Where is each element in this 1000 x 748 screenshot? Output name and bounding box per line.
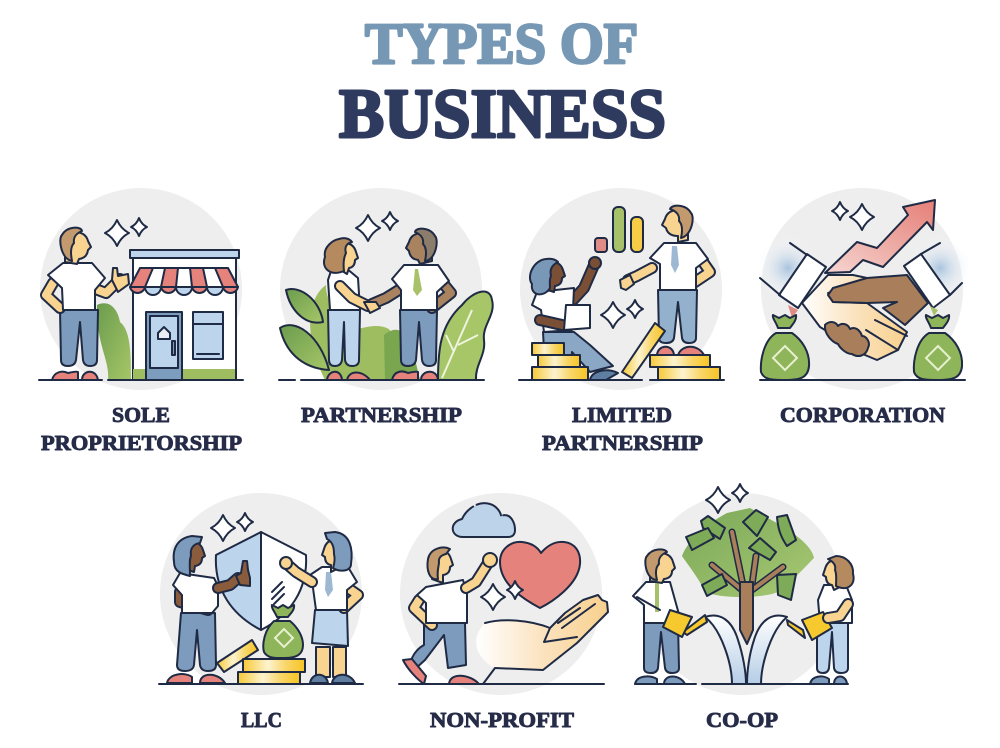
title <box>339 11 666 153</box>
background circle <box>40 188 242 390</box>
label: NON-PROFIT <box>430 708 574 732</box>
label: LLC <box>241 708 282 732</box>
background circle <box>641 493 843 695</box>
label: PROPRIETORSHIP <box>41 431 242 455</box>
ground line <box>279 379 484 381</box>
panel: co-op <box>633 484 854 732</box>
icon: bush <box>97 303 131 380</box>
icon: water streams <box>705 616 787 684</box>
figure: man on coins <box>620 206 710 355</box>
chart: bars <box>595 207 643 252</box>
panel: non-profit <box>399 493 608 732</box>
label: SOLE <box>112 403 170 427</box>
figure: man <box>364 229 451 380</box>
icon: money tree <box>682 508 814 644</box>
icon: rising arrow <box>825 200 935 273</box>
icon: coins and bag <box>217 605 305 684</box>
icon: shop <box>130 250 239 380</box>
label <box>41 403 242 455</box>
icon: plants <box>280 285 493 380</box>
icon: sparkles <box>601 300 643 328</box>
panel: partnership <box>279 188 493 427</box>
icon: heart <box>500 542 580 608</box>
background circle <box>280 188 482 390</box>
label: CO-OP <box>706 708 778 732</box>
icon: shield <box>216 532 306 630</box>
label: PARTNERSHIP <box>301 403 462 427</box>
icon: sparkles <box>211 513 253 541</box>
figure: woman <box>324 238 370 380</box>
decorative glow <box>756 236 972 300</box>
panel: llc <box>159 493 363 732</box>
panel: limited partnership <box>519 188 724 455</box>
icon: sparkles <box>706 484 748 513</box>
ground line <box>399 683 604 685</box>
panel: sole proprietorship <box>39 188 243 455</box>
icon: sparkles <box>356 212 398 241</box>
background circle <box>400 493 602 695</box>
icon: shaking hands <box>760 243 962 360</box>
label <box>542 403 703 455</box>
background circle <box>160 493 362 695</box>
figure: woman with laptop <box>530 257 618 380</box>
icon: coin stacks <box>532 323 720 380</box>
ground line <box>635 683 848 685</box>
icon: sparkles <box>105 218 147 246</box>
label: CORPORATION <box>780 403 945 427</box>
icon: money bags <box>761 315 962 380</box>
figure: walking person <box>403 547 497 684</box>
ground line <box>39 379 243 381</box>
ground line <box>519 379 724 381</box>
ground line <box>159 683 363 685</box>
figure: left woman <box>167 536 250 683</box>
background circle <box>520 188 722 390</box>
figure: left man with watering can <box>633 549 707 684</box>
ground line <box>760 379 965 381</box>
figure: man with thumbs up <box>46 228 129 380</box>
icon: cloud <box>453 503 515 537</box>
icon: sparkles <box>481 581 523 610</box>
icon: open hand <box>476 595 608 684</box>
background circle <box>761 188 963 390</box>
panel: corporation <box>756 188 972 427</box>
icon: sparkles <box>832 202 874 230</box>
label: LIMITED <box>572 403 672 427</box>
figure: right woman <box>280 532 358 683</box>
figure: right woman with watering can <box>787 556 854 684</box>
title line: types of: TYPES OF <box>365 11 638 76</box>
title line: business: BUSINESS <box>339 76 666 153</box>
label: PARTNERSHIP <box>542 431 703 455</box>
